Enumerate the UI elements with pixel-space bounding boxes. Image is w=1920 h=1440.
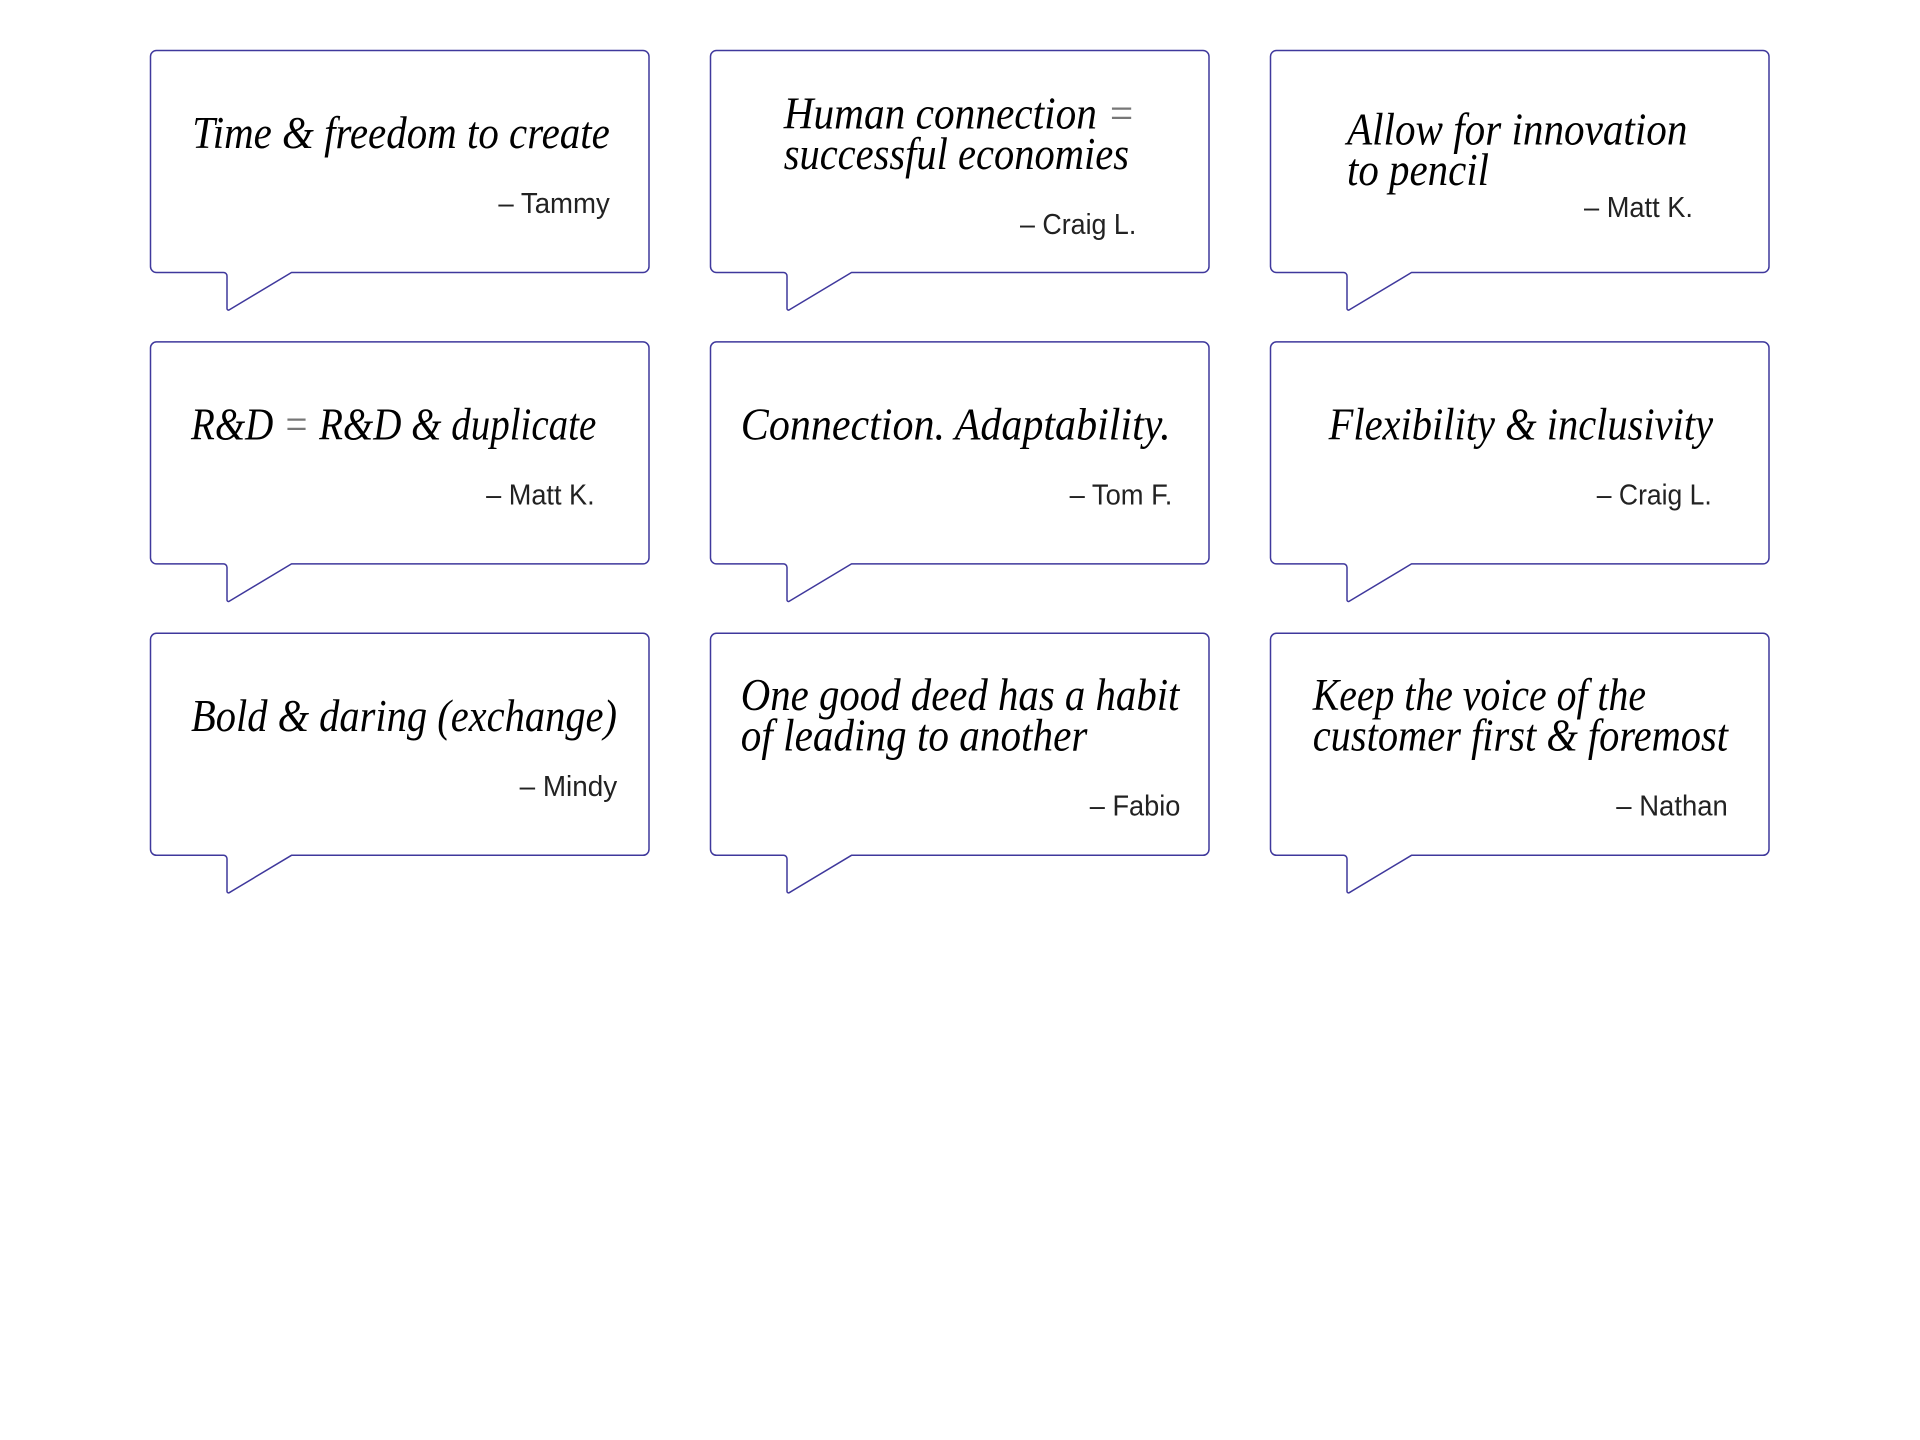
bubble outline [150, 50, 649, 310]
bubble outline [150, 342, 649, 601]
speech bubble: Fabio [710, 633, 1209, 893]
attribution: – Craig L. [1020, 209, 1136, 241]
quote text [783, 89, 1135, 179]
quote text: Human connection = [783, 89, 1135, 139]
speech bubble: Nathan [1270, 633, 1769, 893]
bubble outline [150, 633, 649, 893]
quote text: Bold & daring (exchange) [191, 691, 617, 741]
quote text: Keep the voice of the [1312, 670, 1646, 720]
quote text: Connection. Adaptability. [741, 400, 1171, 450]
quote text: Time & freedom to create [192, 108, 610, 158]
bubble outline [710, 342, 1209, 601]
attribution: – Tammy [498, 188, 610, 220]
quote text: of leading to another [741, 711, 1088, 761]
speech bubble: Craig L. economies [710, 50, 1209, 310]
attribution: – Matt K. [486, 480, 595, 512]
quote text: customer first & foremost [1313, 711, 1729, 761]
speech bubble: Tom F. [710, 342, 1209, 601]
quote text [741, 670, 1181, 761]
quote text: Flexibility & inclusivity [1328, 400, 1713, 450]
speech bubble: Tammy [150, 50, 649, 310]
bubble outline [1270, 50, 1769, 310]
attribution: – Craig L. [1597, 480, 1712, 512]
bubble outline [710, 50, 1209, 310]
quote text [1344, 104, 1687, 195]
speech bubble: Matt K. R&D [150, 342, 649, 601]
attribution: – Fabio [1090, 791, 1180, 823]
speech bubble: Matt K. innovation [1270, 50, 1769, 310]
quote text: R&D = R&D & duplicate [190, 400, 596, 450]
quote text: to pencil [1347, 145, 1489, 195]
speech bubble: Craig L. flexibility [1270, 342, 1769, 601]
quote text: Allow for innovation [1344, 104, 1687, 154]
attribution: – Matt K. [1584, 192, 1693, 224]
bubble outline [710, 633, 1209, 893]
attribution: – Mindy [520, 771, 618, 803]
speech bubble: Mindy [150, 633, 649, 893]
attribution: – Nathan [1616, 791, 1728, 823]
attribution: – Tom F. [1070, 480, 1172, 512]
quote text: One good deed has a habit [741, 670, 1181, 720]
quote text [1312, 670, 1729, 761]
quote text: successful economies [784, 129, 1129, 179]
bubble outline [1270, 342, 1769, 601]
bubble outline [1270, 633, 1769, 893]
